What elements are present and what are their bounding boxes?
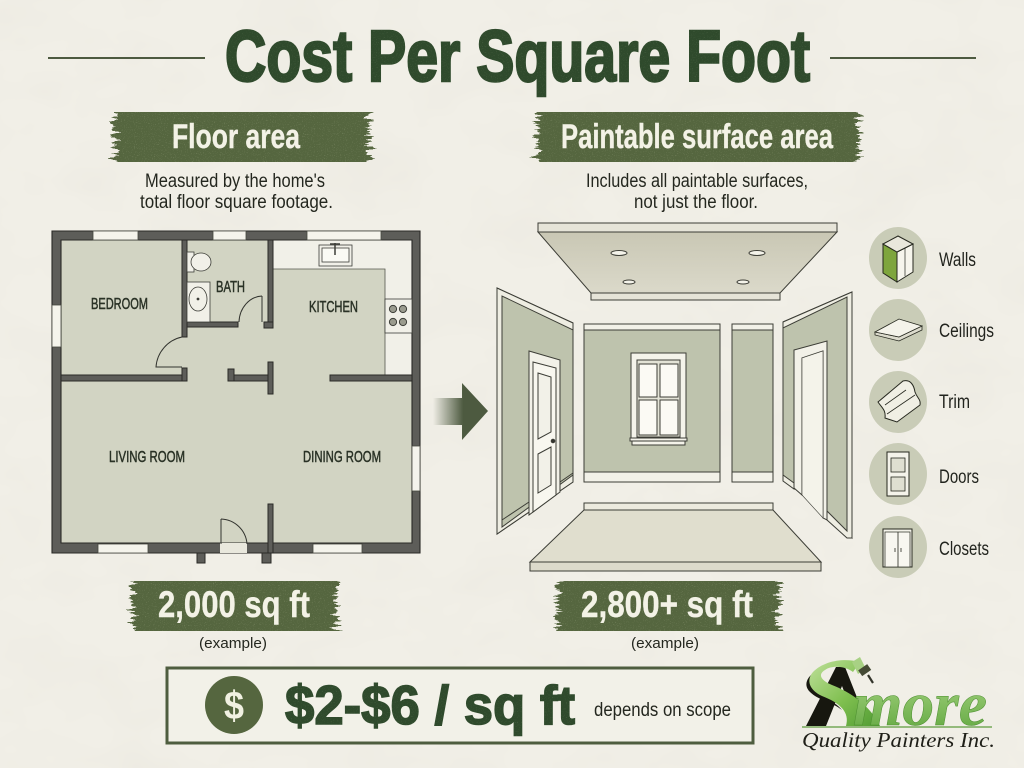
text: floor area description: Measured by the home's	[145, 171, 325, 192]
exploded room	[497, 223, 852, 571]
floor	[530, 503, 821, 571]
measurement: paintable area	[557, 581, 778, 652]
heading: paintable surface area: Paintable surface area	[561, 118, 834, 156]
window	[630, 353, 687, 445]
title: Cost Per Square Foot	[225, 17, 810, 97]
black swoosh shadow	[806, 668, 842, 710]
icon: walls	[869, 227, 927, 289]
heading: floor area: Floor area	[172, 118, 301, 156]
room labels: BEDROOM	[91, 296, 148, 313]
green swoosh	[809, 660, 880, 726]
black A	[806, 667, 858, 726]
measurement: floor area: 2,000 sq ft	[158, 584, 310, 625]
left wall	[497, 288, 573, 534]
label: trim: Trim	[939, 392, 970, 413]
paint brush	[852, 657, 873, 683]
right wall	[783, 292, 852, 538]
label: walls: Walls	[939, 250, 976, 271]
price callout	[167, 668, 753, 743]
bath fixtures	[187, 252, 211, 322]
tagline: Quality Painters Inc.	[802, 728, 995, 752]
wordmark: more	[853, 671, 987, 739]
icon: closets	[869, 516, 927, 578]
icon: dollar	[205, 676, 263, 734]
measurement: floor area: (example)	[199, 635, 267, 652]
room labels: KITCHEN	[309, 299, 358, 316]
walls	[52, 231, 420, 553]
heading: floor area	[114, 112, 369, 162]
icon: doors	[869, 443, 927, 505]
text: floor area description: total floor square footage.	[140, 192, 333, 213]
panel: floor area	[52, 112, 420, 652]
text: paintable description	[586, 171, 808, 213]
label: closets: Closets	[939, 539, 989, 560]
measurement: paintable area: (example)	[631, 635, 699, 652]
arrow	[433, 383, 488, 440]
room labels	[91, 279, 381, 466]
room labels: DINING ROOM	[303, 449, 381, 466]
icon: dollar: $	[224, 684, 244, 728]
heading: paintable surface area	[537, 112, 859, 162]
floor plan	[52, 231, 420, 563]
text: paintable description: Includes all paintable surfaces,	[586, 171, 808, 192]
room labels: LIVING ROOM	[109, 449, 185, 466]
panel: paintable surface area	[497, 112, 994, 652]
measurement: floor area	[132, 581, 336, 652]
side wall panel	[732, 324, 773, 482]
icon: ceilings	[869, 299, 927, 361]
label: ceilings: Ceilings	[939, 321, 994, 342]
room labels: BATH	[216, 279, 245, 296]
surface list	[869, 227, 994, 578]
ceiling	[538, 223, 837, 300]
price text: $2-$6 / sq ft	[285, 674, 575, 736]
door	[529, 351, 560, 515]
label: doors: Doors	[939, 467, 979, 488]
doorway	[794, 341, 827, 520]
logo	[802, 657, 995, 752]
windows	[52, 231, 420, 553]
back wall	[584, 324, 720, 482]
kitchen counters	[273, 240, 412, 375]
text: paintable description: not just the floor.	[634, 192, 758, 213]
kitchen sink and stove	[319, 243, 412, 333]
doors	[156, 296, 262, 544]
measurement: paintable area: 2,800+ sq ft	[581, 584, 753, 625]
icon: trim	[869, 371, 927, 433]
text: floor area description	[140, 171, 333, 213]
scope note: depends on scope	[594, 700, 731, 721]
